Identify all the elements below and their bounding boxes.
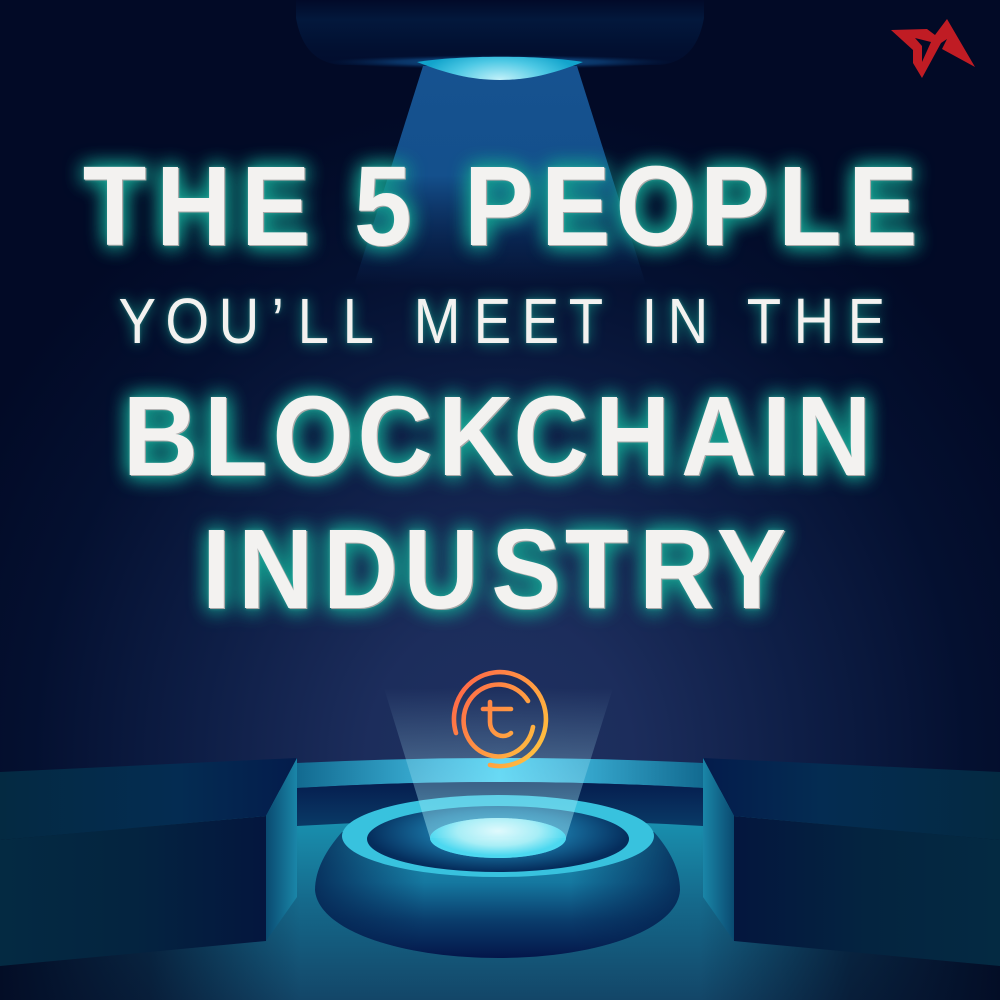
title line 3: BLOCKCHAIN [123,374,871,500]
hologram beam [384,688,613,838]
back wall dark band [297,782,703,826]
lamp lens [417,57,583,80]
title line 3: BLOCKCHAIN [124,375,872,501]
light beam from lamp [354,66,646,285]
lamp housing [296,0,704,65]
floor vignette [0,790,1000,1000]
glowing disc [430,818,566,858]
title line 1: THE 5 PEOPLE [84,145,919,271]
ceiling lamp [296,0,704,285]
pedestal side shading [315,832,680,958]
floor [0,790,1000,1000]
back wall light band [297,758,703,788]
left block [0,758,297,966]
title line 1: THE 5 PEOPLE [83,144,917,270]
stage scene [0,688,1000,1000]
pedestal well [367,806,629,872]
glowing disc highlight [430,818,566,858]
lamp halo [328,55,672,69]
right block [703,758,1000,966]
title line 4: INDUSTRY [203,508,787,634]
title line 4: INDUSTRY [202,507,786,633]
pedestal body [315,832,680,958]
pedestal ring [342,795,654,877]
title line 2: YOU’LL MEET IN THE [119,285,885,357]
icon: token logo [454,672,546,766]
icon: DA brand logo [891,19,975,78]
